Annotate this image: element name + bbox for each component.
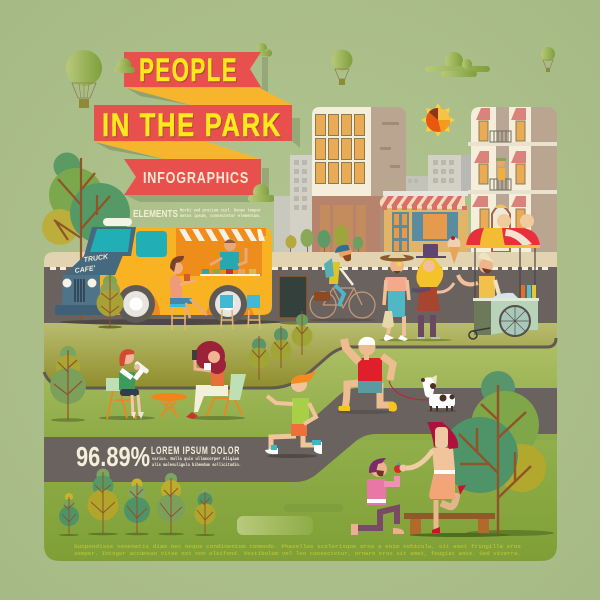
cups on counter xyxy=(200,269,260,276)
lawn tree left xyxy=(50,346,86,422)
balloon centre xyxy=(332,50,352,85)
elements caption: Morbi sed pretium nisl. Donec tempor xyxy=(180,208,261,214)
umbrella xyxy=(466,228,540,246)
condiments xyxy=(521,285,525,299)
banner: people xyxy=(124,52,261,87)
large tree right xyxy=(442,371,554,536)
elements caption: metus ipsum, consectetur elementum. xyxy=(180,214,261,219)
title: people xyxy=(139,52,239,90)
stat number: 96.89% xyxy=(76,441,150,472)
dog leash xyxy=(389,381,428,400)
park panel base xyxy=(44,430,557,561)
wheel arches xyxy=(116,288,254,315)
small background trees xyxy=(286,225,363,252)
truck shadow xyxy=(60,319,280,325)
light puff bottom xyxy=(237,504,343,535)
bumper xyxy=(55,305,115,315)
shop with awning xyxy=(380,191,468,252)
elements caption xyxy=(133,208,261,220)
lawn trees upper xyxy=(248,311,312,380)
roof rack xyxy=(103,218,132,226)
cyclist xyxy=(309,245,375,322)
wheels xyxy=(117,285,247,323)
balloon right xyxy=(541,47,555,72)
orange folds xyxy=(95,88,292,159)
truck lettering: CAFE' xyxy=(74,265,96,275)
street curb dashes xyxy=(50,267,548,270)
ribbon shadows xyxy=(125,57,300,202)
vendor and cart xyxy=(458,214,540,339)
grey buildings xyxy=(274,155,471,252)
windshield xyxy=(90,229,131,252)
truck lettering xyxy=(74,254,109,275)
banner: in the park xyxy=(94,105,292,141)
stat text xyxy=(151,445,241,468)
ice cream cone xyxy=(448,236,460,264)
title: in the park: IN THE PARK xyxy=(102,107,282,143)
hood xyxy=(64,255,123,275)
couple xyxy=(351,422,466,535)
path edge line xyxy=(44,338,556,388)
cart body xyxy=(474,299,538,335)
man kneeling xyxy=(351,458,406,535)
person on balcony xyxy=(496,158,506,180)
title: people: PEOPLE xyxy=(140,54,239,90)
bench xyxy=(404,513,510,537)
cloud by heading top xyxy=(255,43,272,57)
truck body xyxy=(96,227,272,315)
heading ribbons xyxy=(94,52,300,202)
runner man xyxy=(337,337,428,414)
title: in the park: IN THE PARK xyxy=(103,108,283,144)
windshield frame xyxy=(84,227,136,256)
side window xyxy=(136,231,167,257)
hatch awning xyxy=(176,228,266,241)
woman with hat and ice cream xyxy=(408,244,454,341)
food truck xyxy=(55,218,280,330)
footer text xyxy=(74,543,522,557)
street xyxy=(44,267,557,327)
cloud near ribbon left xyxy=(114,58,135,73)
title: people: PEOPLE xyxy=(139,52,238,88)
footer text: Suspendisse venenatis diam nec neque condimentum commodo. Phasellus scelerisque urna a enim vehicula, sit amet fringilla eros xyxy=(74,543,522,550)
runner girl xyxy=(265,371,322,458)
woman sitting right xyxy=(186,341,246,420)
clouds top right xyxy=(425,52,490,77)
stat text: LOREM IPSUM DOLOR xyxy=(151,445,240,457)
cafe table xyxy=(151,393,187,418)
dog xyxy=(421,375,457,412)
customer at truck xyxy=(170,256,207,318)
stat text: alis malesuligula bibendum sollicitudin. xyxy=(152,463,241,468)
elements caption: ELEMENTS xyxy=(133,209,178,220)
truck lettering: TRUCK xyxy=(83,254,109,264)
tree front of truck xyxy=(96,273,124,328)
sidewalk xyxy=(44,252,557,267)
woman standing xyxy=(405,422,466,533)
banner: infographics xyxy=(124,159,261,195)
man in overalls xyxy=(379,252,415,341)
footer text: semper. Integer accumsan vitae est non eleifend. Vestibulum vel leo consectetur, ornare eros sit amet, feugiat ante. Sed viverra. xyxy=(74,550,521,557)
building left with windows xyxy=(312,107,406,252)
balloon left xyxy=(66,50,102,108)
sun xyxy=(421,103,455,137)
stools xyxy=(172,306,260,330)
large tree left xyxy=(42,152,130,323)
service hatch xyxy=(176,232,262,276)
stat text: varius. Nulla quis ullamcorper Aliqiam xyxy=(152,457,239,462)
mid grass xyxy=(44,340,557,440)
vendor xyxy=(210,239,246,270)
olive lawn with path edge xyxy=(44,323,557,389)
roadside sign board xyxy=(279,276,307,324)
grille xyxy=(62,275,100,306)
cloud near ribbon right xyxy=(248,184,275,202)
subtitle: INFOGRAPHICS xyxy=(143,170,249,187)
asphalt path xyxy=(44,388,557,482)
small trees bottom row xyxy=(59,468,216,536)
building right with balconies xyxy=(468,107,557,252)
woman sitting left xyxy=(99,349,155,420)
